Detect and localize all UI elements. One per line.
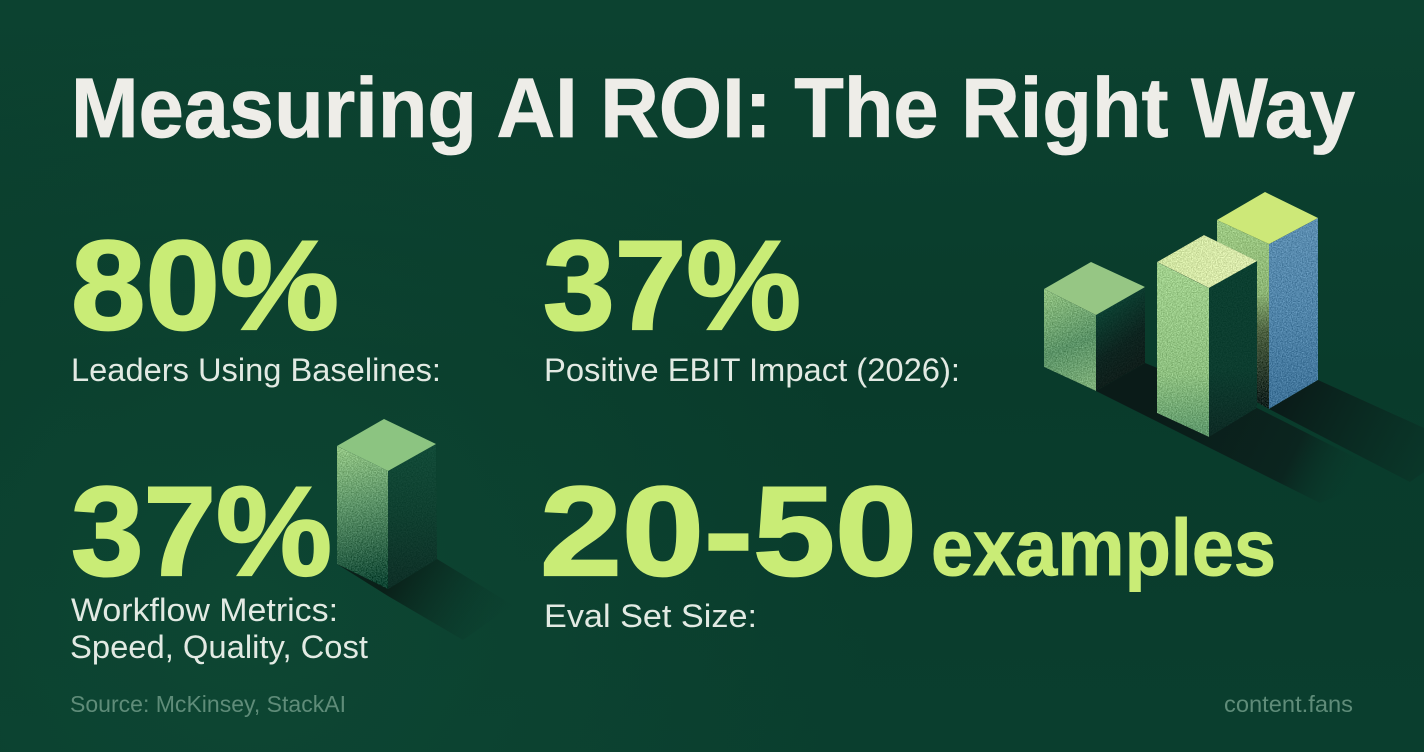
stat: workflow metrics: 37%: [71, 460, 332, 602]
stat: positive EBIT impact: 37%: [543, 214, 801, 356]
stat: eval set size: [540, 460, 1276, 634]
brand credit: content.fans: [1224, 691, 1353, 717]
stat: eval set size: Eval Set Size:: [544, 598, 757, 634]
stat: workflow metrics: Speed, Quality, Cost: [70, 629, 368, 665]
stat: eval set size: 20-50: [540, 460, 917, 602]
stat: leaders using baselines: [71, 214, 441, 388]
icon: single isometric bar: [337, 419, 513, 640]
stat: eval set size: examples: [931, 503, 1276, 592]
stat: positive EBIT impact: [543, 214, 960, 388]
stat: positive EBIT impact: Positive EBIT Impact (2026):: [544, 352, 960, 388]
source note: Source: McKinsey, StackAI: [70, 691, 346, 717]
stat: workflow metrics: [70, 460, 368, 665]
stat: leaders using baselines: Leaders Using Baselines:: [71, 352, 441, 388]
stat: workflow metrics: Workflow Metrics:: [71, 592, 338, 628]
stat: leaders using baselines: 80%: [71, 214, 339, 356]
title: Measuring AI ROI: The Right Way: [71, 61, 1355, 155]
icon: isometric bar chart: [1044, 192, 1424, 503]
